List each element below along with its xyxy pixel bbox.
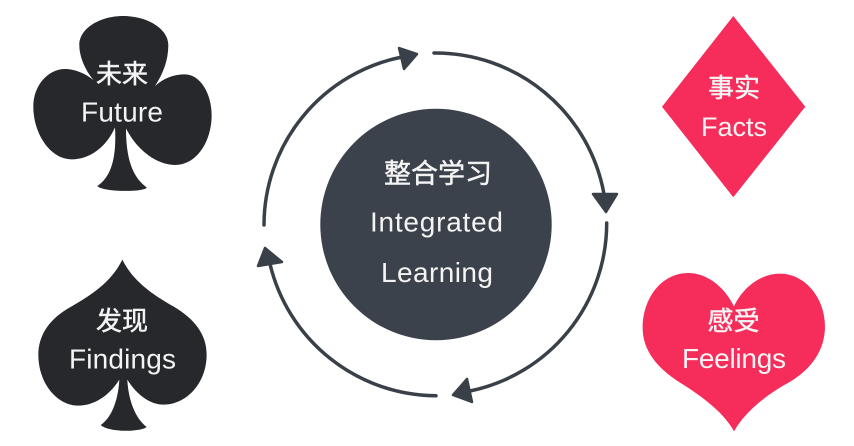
card: future (club) xyxy=(33,16,212,191)
label: future chinese: 未来 xyxy=(96,59,148,89)
arrow: top right arc xyxy=(434,53,617,212)
card: feelings (heart) xyxy=(643,273,825,431)
label: findings chinese: 发现 xyxy=(96,306,148,336)
arrow: bottom right arc xyxy=(453,223,607,402)
icon: heart suit xyxy=(643,273,825,431)
icon: diamond suit xyxy=(662,16,805,197)
label: findings english: Findings xyxy=(69,344,176,374)
central cycle xyxy=(258,48,617,402)
label: facts english: Facts xyxy=(701,112,767,142)
label: facts chinese: 事实 xyxy=(708,73,760,103)
label: learning: Learning xyxy=(381,257,493,288)
card: facts (diamond) xyxy=(662,16,805,197)
label: future english: Future xyxy=(81,96,163,128)
icon: spade suit xyxy=(38,260,207,431)
arrow: top left arc xyxy=(264,48,417,225)
label: integrated: Integrated xyxy=(370,206,503,238)
label: integrated learning chinese: 整合学习 xyxy=(384,159,492,189)
arrow: bottom left arc xyxy=(258,248,436,396)
icon: club suit xyxy=(33,16,212,191)
center circle xyxy=(320,109,552,340)
card: findings (spade) xyxy=(38,260,207,431)
label: feelings chinese: 感受 xyxy=(707,306,760,336)
label: feelings english: Feelings xyxy=(682,343,786,374)
